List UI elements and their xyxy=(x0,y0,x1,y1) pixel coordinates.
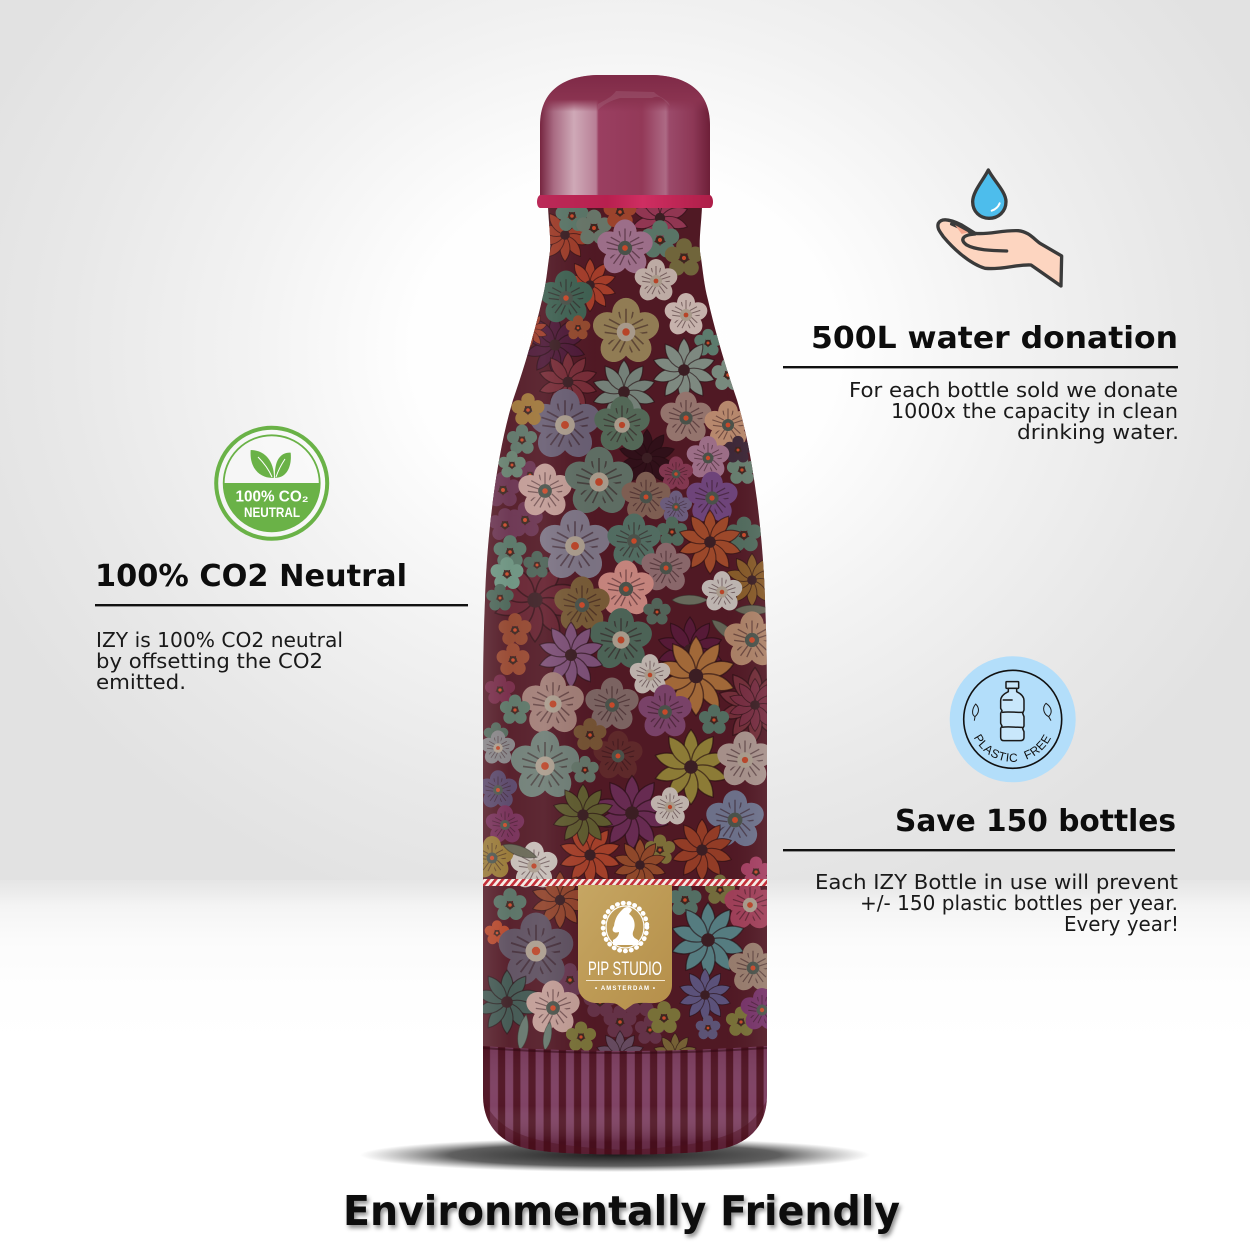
bottle ground shadow xyxy=(360,1138,870,1172)
body text: Each IZY Bottle in use will prevent xyxy=(815,870,1178,894)
panel: Save 150 bottles xyxy=(783,656,1179,936)
striped bottle base xyxy=(483,1046,767,1154)
main title: Environmentally Friendly xyxy=(343,1187,900,1235)
brand name: PIP STUDIO xyxy=(588,959,662,980)
bottle cap xyxy=(537,75,713,208)
cap ring xyxy=(537,195,713,208)
heading: 500L water donation xyxy=(811,321,1178,356)
body text: IZY is 100% CO2 neutral xyxy=(96,628,343,652)
main flowers, middle body xyxy=(484,560,783,746)
body text: Every year! xyxy=(1064,912,1179,936)
icon: CO2 neutral badge xyxy=(214,426,329,541)
icon: water drop over hand xyxy=(938,170,1062,286)
body text xyxy=(96,628,343,694)
body text: drinking water. xyxy=(1017,420,1179,444)
main flowers, neck xyxy=(542,208,720,362)
heading: Save 150 bottles xyxy=(895,804,1176,839)
background: studio wall xyxy=(0,0,1250,890)
panel: 500L water donation xyxy=(783,170,1179,444)
small background flowers xyxy=(490,208,767,1044)
body text: +/- 150 plastic bottles per year. xyxy=(860,891,1178,915)
body text: 1000x the capacity in clean xyxy=(891,399,1178,423)
main flowers, shoulder xyxy=(498,338,757,484)
main flowers, upper body xyxy=(486,436,779,610)
red and white label band xyxy=(483,879,767,886)
icon: CO2 neutral badge: 100% CO₂ xyxy=(236,488,308,506)
icon: CO2 neutral badge: NEUTRAL xyxy=(244,504,300,520)
flowers below the label band xyxy=(483,874,767,1051)
icon: plastic free xyxy=(950,656,1076,782)
body text: For each bottle sold we donate xyxy=(849,378,1178,402)
body text: emitted. xyxy=(96,670,186,694)
icon: plastic free: PLASTIC FREE xyxy=(974,734,1051,762)
bottle xyxy=(483,75,767,1154)
background: floor xyxy=(0,880,1250,1250)
body text xyxy=(849,378,1179,444)
body text: by offsetting the CO2 xyxy=(96,649,323,673)
main flowers, lower body xyxy=(483,678,767,888)
cameo logo xyxy=(603,903,647,951)
bottle body with floral print xyxy=(483,208,767,1051)
panel: 100% CO2 Neutral xyxy=(95,426,468,694)
body text xyxy=(815,870,1179,936)
heading: 100% CO2 Neutral xyxy=(95,559,407,594)
brand city: • AMSTERDAM • xyxy=(595,986,655,992)
gold Pip Studio label xyxy=(578,885,672,1010)
